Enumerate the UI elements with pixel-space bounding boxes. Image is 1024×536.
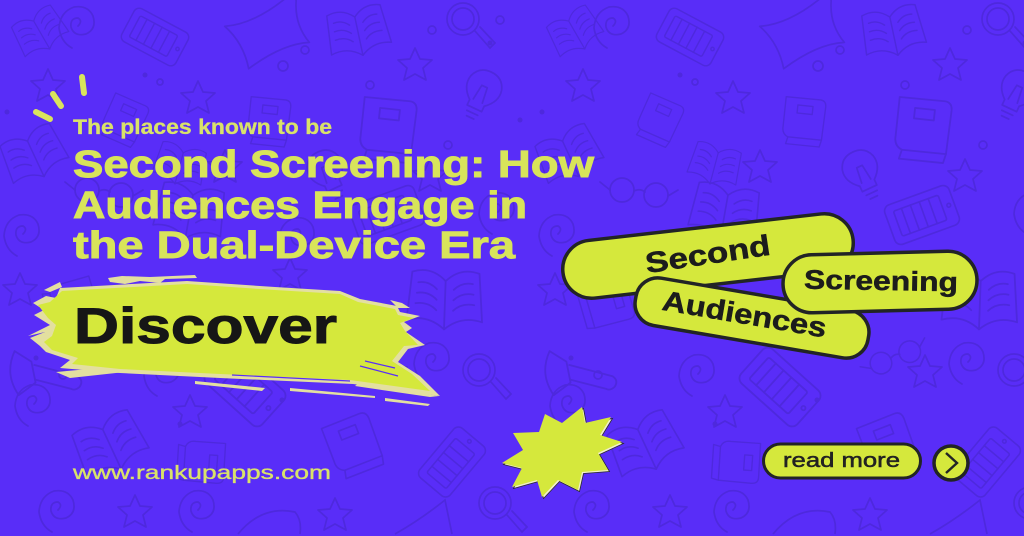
pill: Screening: Screening xyxy=(804,265,958,297)
subheading: The places known to be xyxy=(73,115,332,139)
pill: Audiences: Audiences xyxy=(660,285,829,343)
label: Discover: Discover xyxy=(74,298,337,354)
icon: starburst xyxy=(502,407,624,498)
pill: Audiences xyxy=(632,274,872,362)
title: Audiences Engage in xyxy=(73,185,527,227)
pill: Second xyxy=(560,211,856,301)
title xyxy=(73,144,595,267)
button: read more: read more xyxy=(783,450,900,472)
title: Second Screening: How xyxy=(73,144,595,186)
pill: Screening xyxy=(782,250,978,314)
icon: spark lines xyxy=(36,77,84,119)
title: the Dual-Device Era xyxy=(73,225,516,267)
pill: Second: Second xyxy=(643,230,773,280)
icon: arrow button xyxy=(934,446,968,480)
button: read more xyxy=(764,444,920,478)
brush stroke with Discover label xyxy=(28,275,440,406)
website url: www.rankupapps.com xyxy=(72,462,331,484)
